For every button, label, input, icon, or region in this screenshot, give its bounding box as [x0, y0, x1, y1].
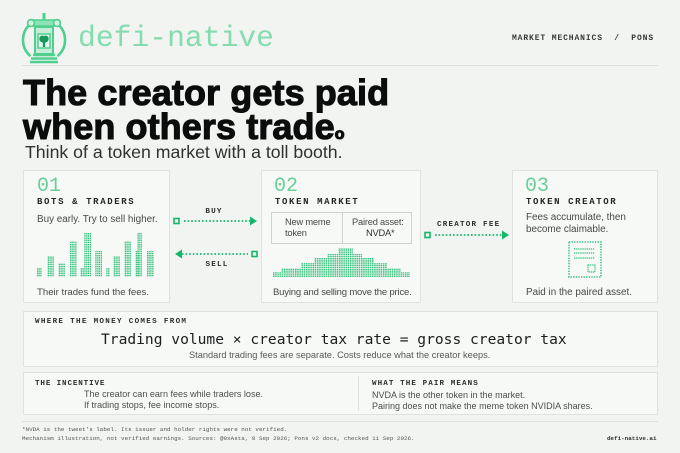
paired asset cell — [352, 217, 404, 238]
logo icon: column in a ring — [22, 13, 66, 64]
arrow: buy — [173, 208, 257, 226]
paired asset cell: Paired asset: — [352, 217, 404, 227]
new meme token cell: token — [285, 228, 307, 238]
heading: WHERE THE MONEY COMES FROM — [35, 318, 187, 326]
heading: bots and traders: BOTS & TRADERS — [37, 197, 135, 207]
panel: where the money comes from — [23, 311, 658, 367]
pair heading: WHAT THE PAIR MEANS — [372, 380, 479, 388]
note: the incentive — [35, 380, 263, 410]
arrow: creator fee — [424, 221, 509, 240]
subtitle: Think of a token market with a toll booth. — [25, 142, 343, 162]
incentive text: The creator can earn fees while traders lose. — [84, 389, 263, 399]
description: Fees accumulate, then — [526, 212, 626, 223]
footnote: Mechanism illustration, not verified earnings. Sources: @0xAsta, 8 Sep 2026; Pons v2 docs, checked 11 Sep 2026. — [22, 435, 415, 442]
paired asset cell: NVDA* — [366, 228, 394, 238]
arrow: sell — [175, 250, 258, 269]
website: defi-native.ai — [607, 435, 656, 442]
icon: dotted document — [568, 241, 602, 278]
footnote: *NVDA is the tweet's label. Its issuer and holder rights were not verified. — [22, 426, 287, 433]
pair text: NVDA is the other token in the market. — [372, 390, 525, 400]
description: become claimable. — [526, 224, 608, 235]
brand wordmark: defi-native — [78, 21, 274, 55]
panel: token market — [261, 170, 421, 303]
heading: token market: TOKEN MARKET — [275, 197, 359, 207]
title: The creator gets paid — [23, 72, 389, 112]
incentive heading: THE INCENTIVE — [35, 380, 105, 388]
description — [526, 212, 626, 235]
footnote — [22, 426, 415, 442]
caption: Buying and selling move the price. — [273, 287, 412, 298]
title — [22, 72, 389, 146]
step number 01: 01 — [37, 175, 61, 198]
formula note: Standard trading fees are separate. Costs reduce what the creator keeps. — [189, 350, 490, 360]
panel: token creator — [512, 170, 658, 303]
incentive text — [84, 389, 263, 410]
note: what the pair means — [372, 380, 593, 411]
new meme token cell: New meme — [285, 217, 330, 227]
description: Buy early. Try to sell higher. — [37, 214, 158, 225]
sell label: SELL — [205, 261, 229, 269]
heading: token creator: TOKEN CREATOR — [526, 197, 617, 207]
pair text — [372, 390, 593, 411]
caption: Their trades fund the fees. — [37, 287, 149, 298]
step number 03: 03 — [525, 175, 549, 198]
panel: bots and traders — [23, 170, 170, 303]
step number 02: 02 — [274, 175, 298, 198]
section tag: MARKET MECHANICS / PONS — [512, 34, 654, 43]
pair text: Pairing does not make the meme token NVIDIA shares. — [372, 400, 593, 410]
formula: Trading volume × creator tax rate = gross creator tax — [101, 331, 567, 348]
caption: Paid in the paired asset. — [526, 287, 632, 298]
buy label: BUY — [205, 208, 223, 216]
token pair table — [271, 212, 412, 244]
creator fee label: CREATOR FEE — [437, 221, 500, 229]
bar chart: dotted trades — [37, 233, 154, 277]
dotted price distribution — [273, 248, 410, 277]
title: when others tradeo — [23, 106, 345, 146]
panel: incentive and pair notes — [23, 372, 658, 415]
new meme token cell — [285, 217, 330, 238]
incentive text: If trading stops, fee income stops. — [84, 400, 219, 410]
